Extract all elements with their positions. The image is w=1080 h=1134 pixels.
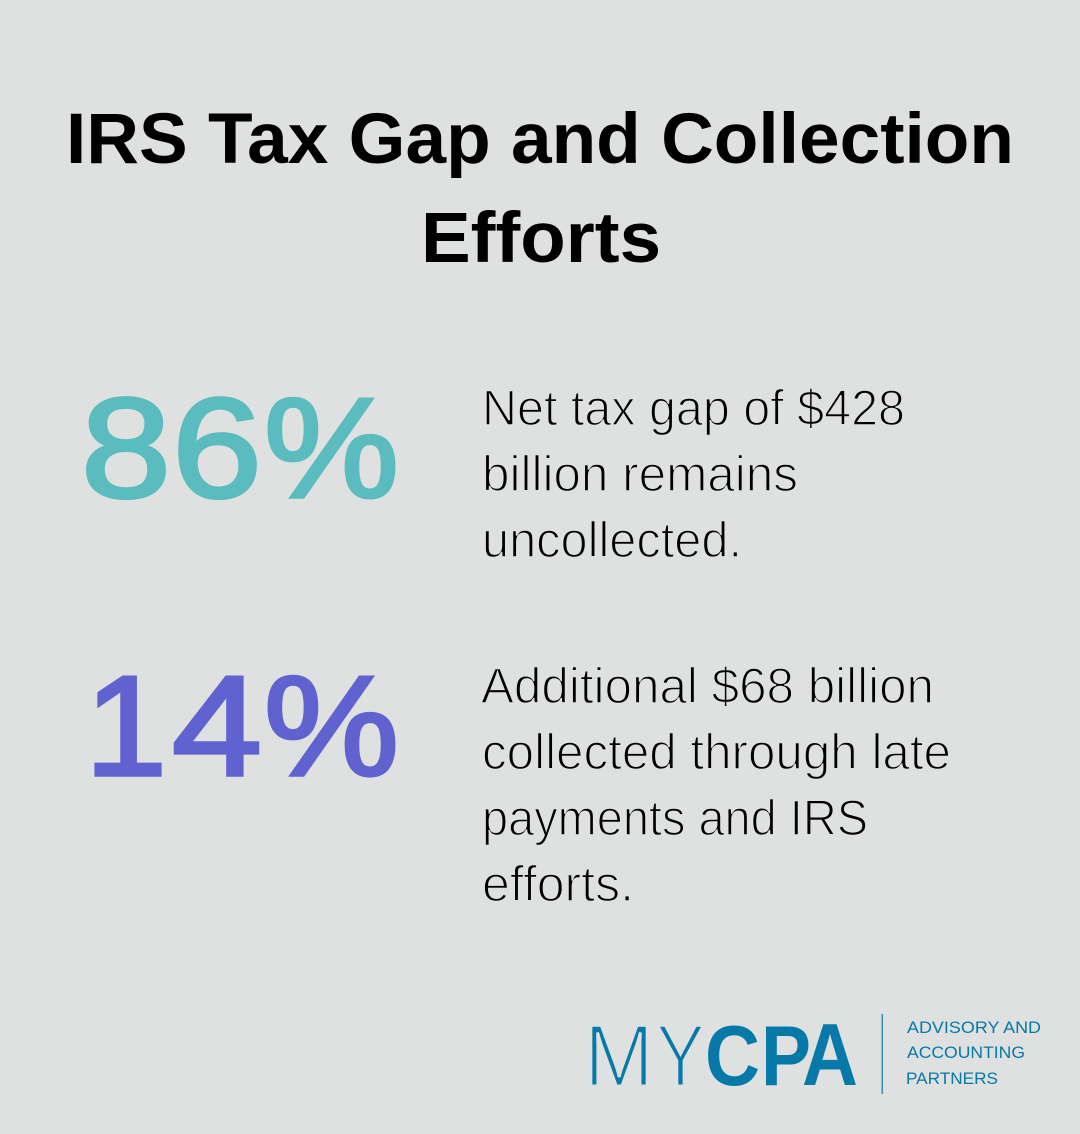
logo tagline: ACCOUNTING <box>907 1043 1025 1062</box>
stat: 86 percent <box>81 369 399 528</box>
logo wordmark: P <box>761 1009 811 1104</box>
text: additional collected: payments and IRS <box>482 790 868 846</box>
stat: 14 percent: % <box>264 647 399 806</box>
logo wordmark <box>584 1005 858 1105</box>
text: net tax gap <box>482 380 905 568</box>
stat: 86 percent: % <box>264 369 399 528</box>
logo tagline: PARTNERS <box>906 1069 998 1088</box>
text: additional collected: Additional $68 billion <box>481 658 934 714</box>
text: additional collected: collected through late <box>482 724 951 780</box>
text: additional collected: efforts. <box>482 856 634 912</box>
logo tagline <box>906 1018 1041 1088</box>
stat: 14 percent: 1 <box>85 647 167 806</box>
logo wordmark: C <box>705 1009 760 1104</box>
logo wordmark: A <box>802 1005 858 1104</box>
stat: 86 percent: 8 <box>81 369 171 528</box>
logo: MYCPA <box>584 1005 1041 1105</box>
logo tagline: ADVISORY AND <box>907 1018 1041 1037</box>
title: Efforts <box>421 199 661 278</box>
logo wordmark: Y <box>656 1006 705 1105</box>
logo wordmark: M <box>584 1006 654 1105</box>
text: net tax gap: Net tax gap of $428 <box>482 380 905 436</box>
stat: 14 percent: 4 <box>172 647 262 806</box>
stat: 86 percent: 6 <box>172 369 262 528</box>
text: additional collected <box>481 658 951 912</box>
logo divider <box>882 1014 883 1094</box>
title <box>66 100 1014 278</box>
text: net tax gap: uncollected. <box>482 512 742 568</box>
title: IRS Tax Gap and Collection <box>66 100 1014 179</box>
text: net tax gap: billion remains <box>482 446 798 502</box>
stat: 14 percent <box>85 647 399 806</box>
